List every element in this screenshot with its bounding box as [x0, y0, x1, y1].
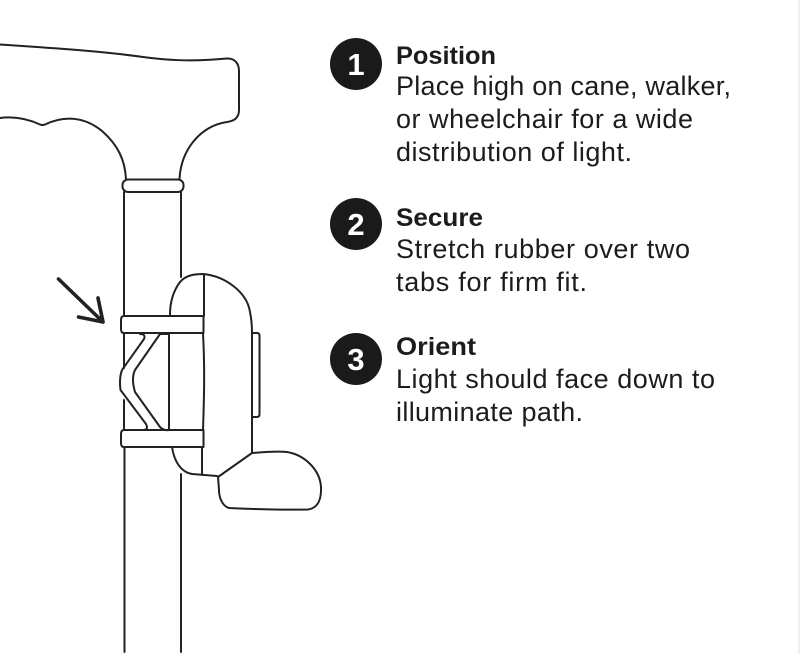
body text: position: distribution of light. [396, 137, 632, 167]
number badge 1 [330, 38, 382, 90]
number badge 3 [330, 333, 382, 385]
body text: orient: Light should face down to [396, 364, 715, 394]
body text: position: or wheelchair for a wide [396, 104, 693, 134]
rubber band straps [121, 316, 204, 447]
body text: secure: tabs for firm fit. [396, 267, 587, 297]
light head [218, 452, 321, 510]
illustration: cane with light attached [0, 44, 321, 652]
cane handle [0, 44, 239, 179]
body text: position: Place high on cane, walker, [396, 71, 731, 101]
arrow pointing at band [58, 279, 103, 322]
heading: secure: Secure [396, 204, 483, 232]
light housing [170, 274, 252, 476]
step 3: orient [330, 333, 715, 427]
cane shaft [124, 192, 181, 652]
number badge 3: 3 [347, 342, 365, 377]
rubber band crossing [120, 334, 169, 430]
number badge 2: 2 [347, 207, 365, 242]
step 1: position [330, 38, 731, 167]
body text: secure: Stretch rubber over two [396, 234, 690, 264]
number badge 1: 1 [347, 47, 365, 82]
body text: position [396, 71, 731, 167]
body text: secure [396, 234, 690, 297]
heading: orient: Orient [396, 333, 477, 361]
side button [253, 333, 260, 417]
body text: orient [396, 364, 715, 427]
cane collar [122, 180, 184, 192]
body text: orient: illuminate path. [396, 397, 583, 427]
number badge 2 [330, 198, 382, 250]
step 2: secure [330, 198, 690, 297]
heading: position: Position [396, 42, 496, 70]
